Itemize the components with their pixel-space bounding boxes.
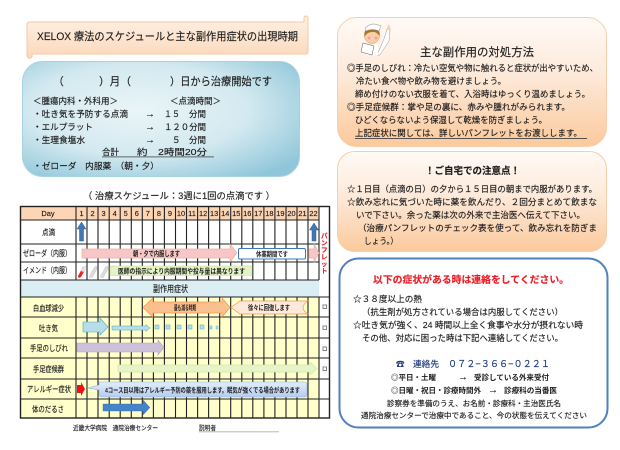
pamphlet vertical label: ト [321, 268, 328, 275]
allergy red arrow [77, 382, 85, 396]
contact routing: → [458, 372, 468, 383]
contact routing [391, 372, 558, 396]
drug and time list: ・生理食塩水 [33, 134, 85, 145]
pamphlet vertical label: レ [321, 254, 328, 261]
drug and time list: ・エルプラット [33, 122, 93, 132]
drug and time list: ・吐き気を予防する点滴 [33, 108, 128, 119]
day header: 8 [157, 209, 161, 218]
rest period box: 休薬期間です [256, 250, 288, 258]
grid lines [20, 206, 330, 418]
drug and time list: 合計 [102, 146, 119, 157]
symptoms text: ☆３８度以上の熱 [353, 293, 422, 304]
day header: 19 [276, 209, 285, 218]
contact routing: 診療科の当番医 [504, 386, 558, 395]
advice text: 上記症状に関しては、詳しいパンフレットをお渡しします。 [355, 127, 582, 138]
day header: 14 [221, 209, 229, 218]
precautions text: （治療パンフレットのチェック表を使って、飲み忘れを防ぎま [358, 222, 597, 233]
precautions text: いで下さい。余った薬は次の外来で主治医へ伝えて下さい。 [356, 209, 585, 220]
day header: 20 [287, 209, 296, 218]
drug and time list: １２０分間 [164, 122, 206, 132]
day header: 6 [135, 209, 139, 218]
arrow: infusion day 1 [77, 222, 86, 241]
drug and time list: ＜点滴時間＞ [170, 95, 221, 106]
day header: 11 [188, 209, 196, 218]
leukopenia recovery arrow [231, 301, 308, 314]
emend note [110, 266, 252, 276]
instructions: 診察券を準備のうえ、お名前・診療科・主治医氏名 [387, 399, 561, 408]
schedule chart [20, 206, 330, 418]
contact number [396, 359, 550, 370]
day header: 15 [232, 209, 240, 218]
contact routing: ◎日曜・祝日・診療時間外 [391, 386, 482, 395]
day header: 3 [102, 209, 106, 218]
advice text: ひどくならないよう保湿して乾燥を防ぎましょう。 [355, 114, 547, 125]
drug and time list: ・ゼローダ 内服薬 （朝・夕） [33, 160, 159, 171]
day header: 22 [309, 209, 318, 218]
xeloda restart arrow [309, 244, 319, 262]
instructions [361, 399, 587, 420]
footer: explainer line [199, 423, 279, 432]
day header: 1 [79, 209, 84, 218]
emend note: 医師の指示により内服期間や投与量は異なります [118, 266, 245, 276]
contact number: 連絡先 [413, 359, 439, 369]
symptoms text: ☆吐き気が強く、24 時間以上全く食事や水分が摂れない時 [353, 319, 583, 330]
symptoms text: （抗生剤が処方されている場合は内服してください） [362, 306, 563, 317]
drug and time list: 約 2時間20分 [137, 146, 207, 157]
xeloda arrow [82, 244, 237, 262]
precautions text: ☆１日目（点滴の日）の夕から１５日目の朝まで内服があります。 [347, 183, 597, 194]
chart frame [20, 206, 330, 418]
drug and time list: → [145, 135, 155, 146]
emend pills [78, 265, 108, 278]
drug and time list: ＜腫瘍内科・外科用＞ [33, 95, 118, 106]
row labels: イメンド（内服） [23, 265, 71, 275]
leukopenia lowest period arrow: 最も減る時期 [174, 303, 196, 312]
contact routing: → [488, 385, 498, 396]
start date line: ）月（ [99, 75, 131, 88]
contact number: ０７２−３６６−０２２１ [448, 359, 550, 370]
symptoms text [353, 293, 583, 343]
contact routing: ◎平日・土曜 [391, 373, 437, 382]
allergy callout [88, 382, 307, 397]
footer: hospital name: 近畿大学病院 通院治療センター [73, 423, 158, 432]
row labels: 点滴 [42, 227, 55, 237]
pamphlet vertical label: ン [321, 240, 328, 247]
drug and time list: 分間 [189, 109, 206, 119]
start date line [53, 74, 272, 88]
pamphlet vertical label [321, 232, 328, 275]
row backgrounds [20, 206, 330, 418]
xeloda arrow: 朝・夕で内服します [133, 249, 180, 258]
day header: 21 [298, 209, 307, 218]
day header: Day [41, 209, 55, 218]
panel: when to contact [340, 258, 608, 428]
allergy callout: 4コース目以降はアレルギー予防の薬を服用します。眠気が強くでる場合があります [105, 386, 300, 394]
drug and time list: 分間 [189, 135, 206, 145]
leukopenia recovery arrow: 徐々に回復します [248, 303, 290, 312]
symptoms text: その他、対応に困った時は下記へ連絡してください。 [362, 332, 563, 343]
drug and time list: → [145, 109, 155, 120]
pamphlet vertical label: フ [321, 246, 328, 254]
nausea arrow [83, 318, 218, 335]
schedule heading: （ 治療スケジュール：3週に1回の点滴です ） [83, 190, 275, 201]
day header: 4 [113, 209, 117, 218]
icon: nurse [361, 24, 391, 55]
day header: 17 [254, 209, 262, 218]
day header: 13 [210, 209, 218, 218]
drug and time list: → [145, 122, 155, 133]
row labels: ゼローダ（内服） [23, 248, 71, 258]
day header: 12 [199, 209, 207, 218]
heading: ！ご自宅での注意点！ [425, 165, 520, 177]
numbness arrow [77, 340, 164, 355]
advice text: 冷たい食べ物や飲み物を避けましょう。 [356, 75, 506, 86]
pamphlet vertical label: ッ [321, 261, 328, 268]
row labels: 吐き気 [39, 323, 58, 333]
arrow: infusion day 22 [310, 223, 318, 241]
title text: XELOX 療法のスケジュールと主な副作用症状の出現時期 [37, 29, 298, 43]
day header: 18 [265, 209, 274, 218]
day header: 16 [243, 209, 251, 218]
instructions: 通院治療センターで治療中であること、今の状態を伝えてください [361, 411, 587, 420]
drug and time list [33, 95, 221, 171]
panel: treatment start and infusion time [22, 62, 300, 176]
row labels: アレルギー症状 [27, 384, 71, 394]
day header: 10 [177, 209, 185, 218]
contact routing: 受診している外来受付 [474, 373, 550, 382]
day header [41, 209, 318, 218]
day header: 7 [146, 209, 150, 218]
row labels: 体のだるさ [32, 404, 64, 414]
day header: 9 [168, 209, 172, 218]
day header: 2 [90, 209, 95, 218]
title banner [27, 16, 308, 58]
hand-foot syndrome arrow [118, 362, 317, 375]
panel: management of side effects [338, 18, 606, 146]
start date line: ）日から治療開始です [170, 74, 272, 88]
row labels: 手足症候群 [33, 364, 64, 374]
contact number: ☎ [396, 359, 405, 369]
row labels: 手足のしびれ [30, 343, 68, 353]
advice text [347, 62, 598, 139]
start date line: （ [53, 75, 64, 88]
leukopenia lowest period arrow [143, 298, 230, 317]
drug and time list: １５ [164, 109, 180, 119]
red heading: 以下の症状がある時は連絡をしてください。 [373, 273, 569, 286]
row labels: 白血球減少 [33, 303, 64, 313]
advice text: 締め付けのない衣服を着て、入浴時はゆっくり温めましょう。 [355, 88, 590, 99]
footer: explainer line: 説明者 [199, 423, 216, 432]
precautions text [347, 183, 597, 246]
panel: precautions at home [338, 152, 606, 252]
advice text: ◎手足のしびれ：冷たい空気や物に触れると症状が出やすいため、 [347, 62, 598, 73]
precautions text: しょう。） [364, 236, 398, 246]
row labels [23, 227, 188, 414]
fatigue arrow [103, 400, 150, 415]
checkboxes [323, 305, 326, 370]
row labels: 副作用症状 [153, 283, 188, 294]
advice text: ◎手足症候群：掌や足の裏に、赤みや腫れがみられます。 [347, 101, 570, 112]
pamphlet vertical label: パ [321, 232, 328, 240]
precautions text: ☆飲み忘れに気づいた時に薬を飲んだり、２回分まとめて飲まな [347, 196, 597, 207]
rest period box [238, 248, 306, 259]
day header: 5 [124, 209, 128, 218]
heading: 主な副作用の対処方法 [420, 45, 535, 59]
drug and time list: ５ [172, 135, 181, 145]
